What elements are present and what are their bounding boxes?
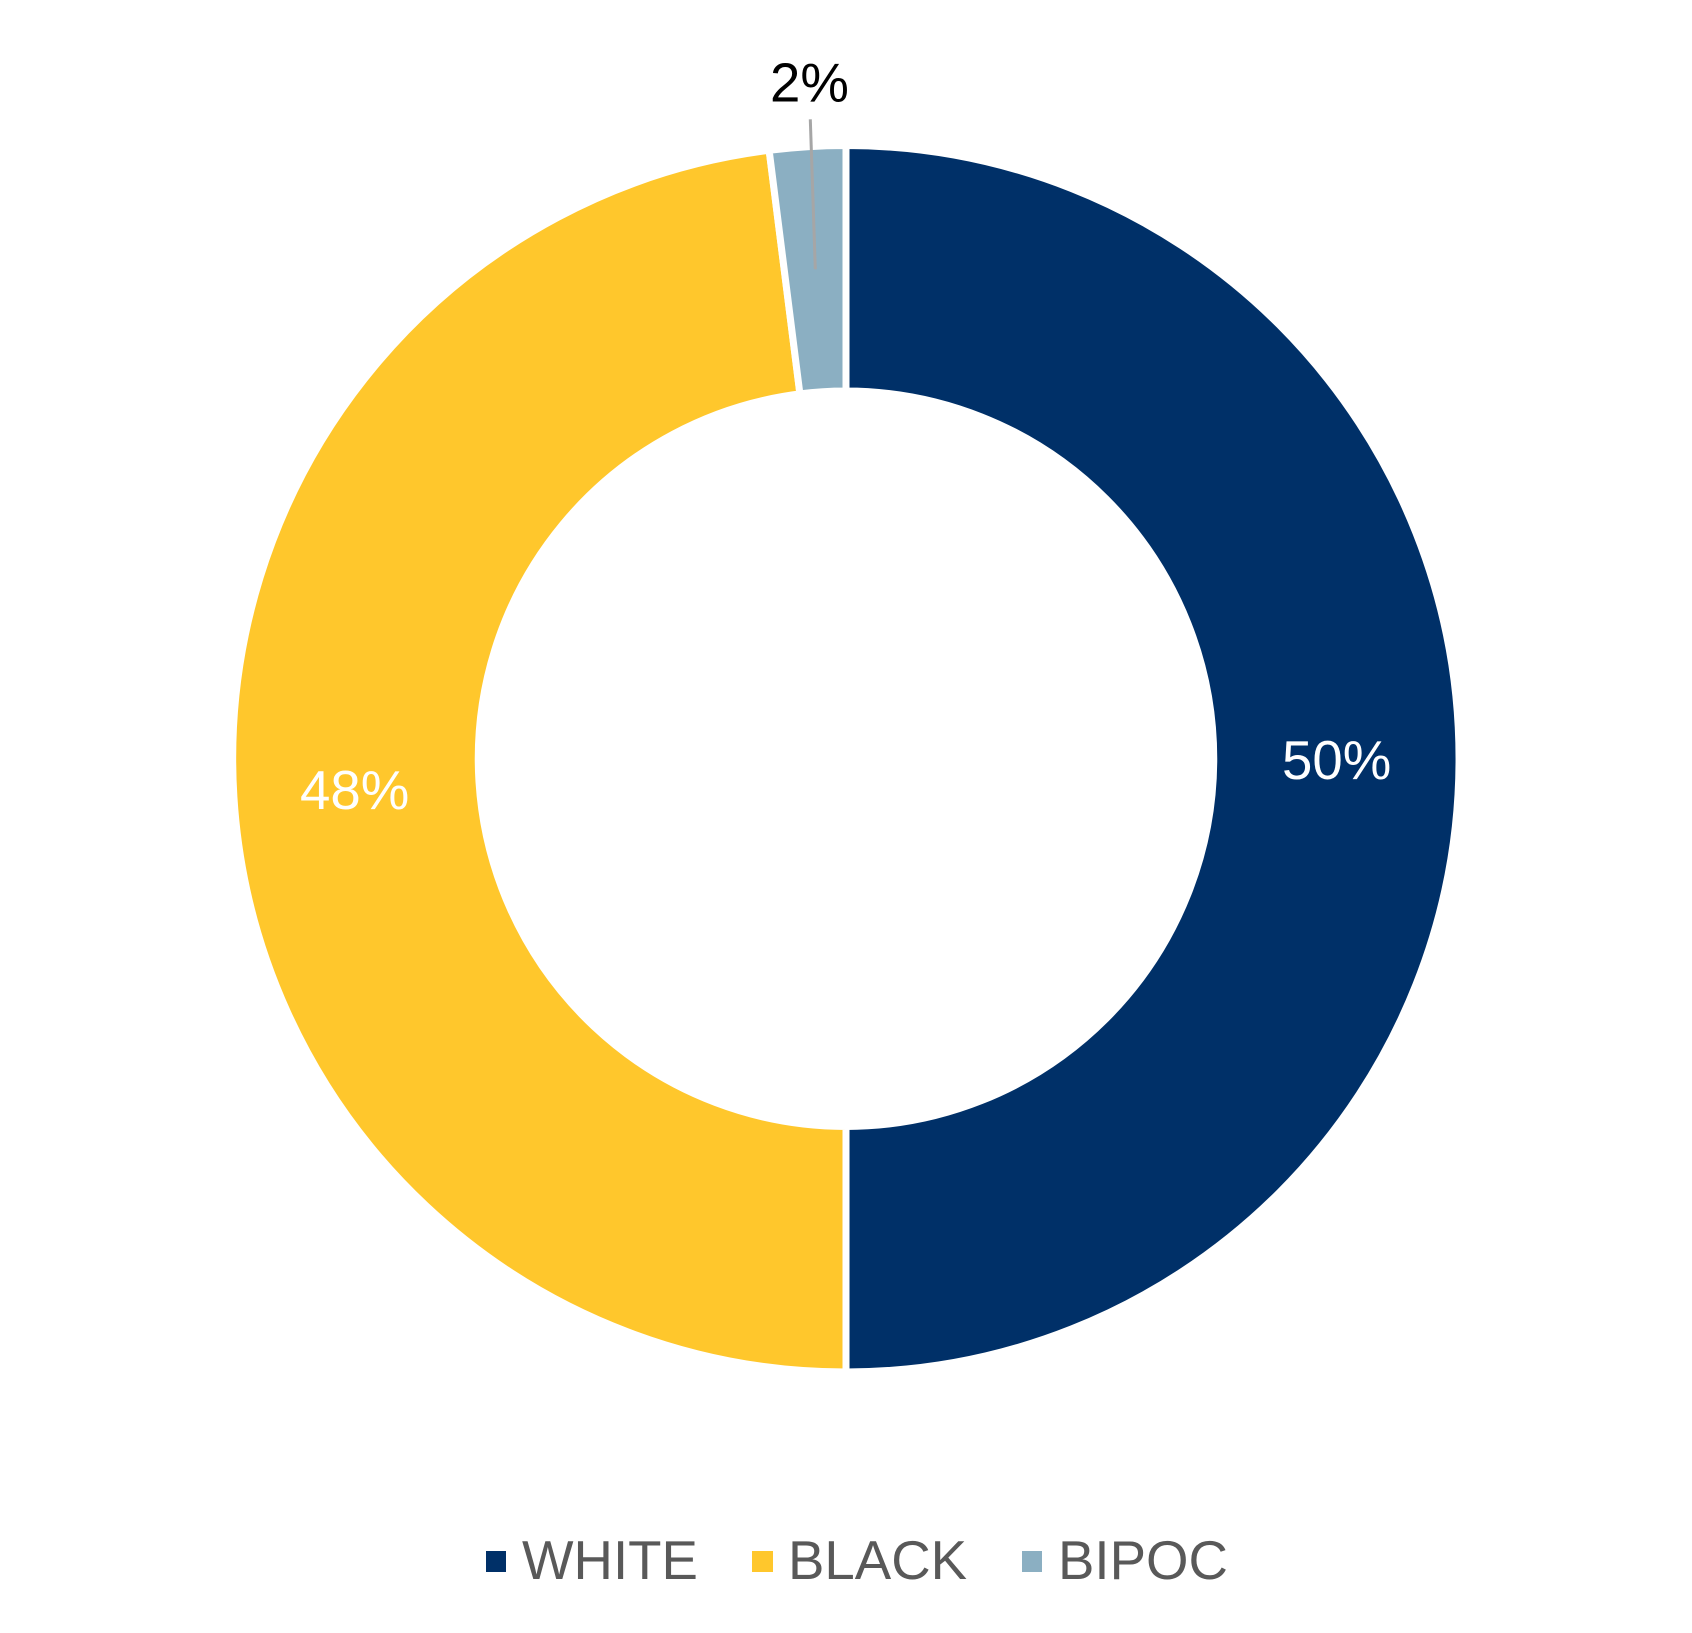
data label: 2%: 2% [770,52,849,114]
legend item: black: BLACK [788,1530,967,1591]
legend [486,1530,1228,1591]
legend item: white: WHITE [522,1530,698,1591]
data label: 50%: 50% [1282,730,1391,791]
donut ring [233,146,1459,1372]
legend item: BIPOC: BIPOC [1058,1530,1228,1591]
leader line for 2% label [810,119,815,269]
segment: BIPOC 2% [769,146,846,394]
segment: black 48% [233,150,846,1372]
data label: 48%: 48% [300,760,409,821]
segment: white 50% [846,146,1459,1372]
